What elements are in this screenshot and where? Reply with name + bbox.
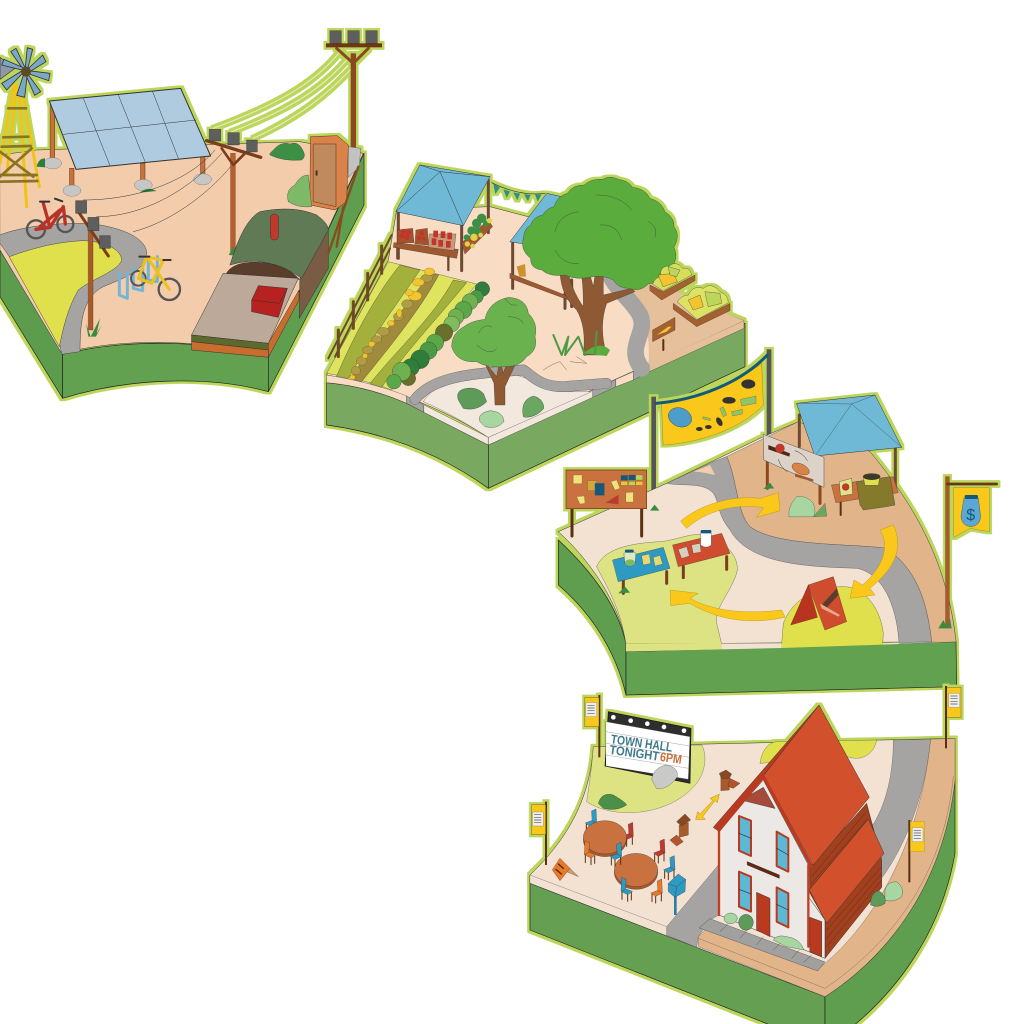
market stall: vegetables	[393, 165, 493, 271]
side wall	[810, 803, 882, 958]
crop rows	[327, 262, 477, 390]
upper power lines	[213, 52, 351, 138]
roof rake	[713, 705, 819, 831]
front wall	[719, 780, 825, 958]
red table	[673, 530, 730, 578]
window mullions	[739, 833, 788, 910]
hall name plate	[747, 862, 779, 878]
lawn bush	[598, 794, 627, 809]
jar flag: $	[966, 507, 975, 524]
garden shrubs	[458, 388, 544, 428]
raised beds	[650, 263, 730, 327]
panel: exchange and cycle	[558, 349, 997, 695]
main roof	[764, 705, 869, 865]
utility pole rear	[326, 31, 382, 148]
bush	[789, 496, 827, 517]
ground top	[327, 207, 744, 437]
red bicycle	[27, 199, 73, 238]
root cellar and slab	[192, 209, 328, 357]
foundation shrubs	[724, 913, 804, 950]
notice board	[566, 470, 659, 536]
front edge lines	[530, 777, 953, 988]
sign post left lower	[532, 802, 547, 865]
small tree	[452, 297, 536, 405]
windmill	[0, 48, 50, 207]
outhouse and concrete pad	[310, 136, 361, 210]
ground sides	[558, 540, 957, 695]
ground sides	[0, 153, 364, 398]
grey paths	[415, 275, 642, 399]
bushes	[270, 143, 312, 207]
utility pole middle	[207, 129, 261, 255]
hedge row	[387, 282, 490, 389]
tan verge	[698, 738, 955, 997]
windows	[739, 816, 788, 927]
yellow bicycle and rack	[119, 257, 180, 300]
large tree	[523, 177, 677, 370]
doors	[757, 892, 822, 957]
speakers and walkway	[670, 770, 740, 846]
ground sides	[530, 780, 955, 1024]
mailbox	[668, 874, 686, 915]
front rim	[626, 641, 956, 652]
town hall building	[713, 705, 884, 958]
sandwich board	[552, 858, 578, 881]
double arrow	[696, 794, 719, 819]
siding lines	[812, 813, 882, 947]
food sign	[763, 434, 824, 503]
carrot sign	[653, 317, 675, 350]
ground zones	[597, 422, 956, 644]
road right	[867, 739, 931, 888]
ground top	[0, 142, 363, 357]
canopy	[797, 395, 902, 487]
sign post right top	[945, 686, 961, 748]
blue table	[613, 547, 670, 593]
tent with hands	[791, 577, 847, 630]
panel: food and farm	[327, 165, 745, 488]
panel: energy and transport	[0, 31, 382, 398]
lime lawn behind hall	[760, 740, 877, 763]
lawn and path	[0, 223, 147, 354]
arrow: top	[681, 493, 780, 528]
marquee sign: 6PM	[659, 750, 683, 767]
utility pole front	[76, 201, 110, 337]
cafe tables and chairs	[583, 809, 675, 903]
ground top	[530, 738, 955, 997]
marquee sign	[605, 712, 691, 789]
marquee sign: TOWN HALL	[610, 732, 674, 755]
market table and pot	[832, 473, 898, 515]
marquee sign: TONIGHT	[609, 743, 660, 764]
sign post right lower	[908, 820, 924, 882]
gable fascia	[719, 777, 812, 867]
pale lawn	[587, 745, 705, 813]
lower wires	[83, 150, 233, 232]
solar array	[37, 88, 212, 196]
sign post left top	[585, 695, 600, 757]
bunting	[492, 183, 545, 202]
verge bushes	[871, 882, 903, 906]
market stall: rear	[510, 193, 573, 308]
wall trim	[719, 830, 808, 947]
lower roof	[809, 819, 884, 923]
tan corner	[620, 280, 744, 365]
rock border	[699, 919, 825, 971]
ground top	[558, 422, 956, 644]
white garden bed	[423, 373, 592, 437]
banner with poles	[651, 349, 771, 508]
arrow: lower	[670, 590, 785, 621]
ground sides	[327, 323, 745, 488]
front rim	[327, 321, 744, 445]
fence	[328, 235, 392, 358]
embankment braces	[328, 167, 358, 253]
road left	[667, 865, 719, 947]
gable vent	[742, 787, 775, 808]
arrow: right	[850, 525, 898, 598]
jar flag	[938, 477, 997, 628]
panel: town hall	[530, 686, 961, 1024]
